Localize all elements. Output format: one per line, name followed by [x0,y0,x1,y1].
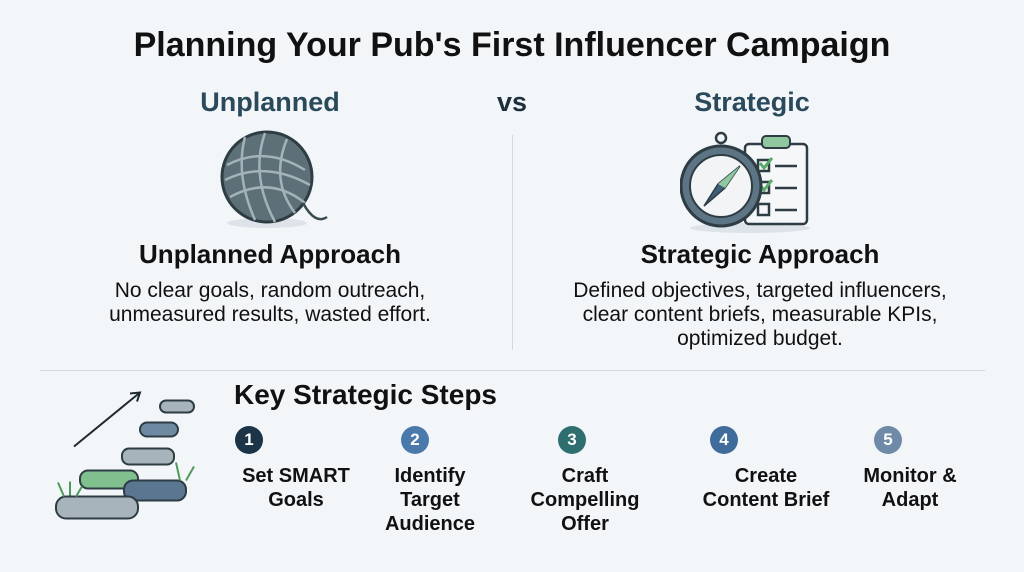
text: Offer [561,513,609,535]
heading: unplanned: Unplanned [200,87,340,117]
step 5 [863,426,957,511]
icon: compass and clipboard [680,132,810,233]
text: unplanned approach: No clear goals, random outreach, [115,279,425,302]
text: Create [735,465,797,487]
text: Target [400,489,460,511]
text: Compelling [531,489,639,511]
text: 3 [567,430,577,449]
heading: key strategic steps: Key Strategic Steps [234,379,497,410]
text: strategic approach [573,239,947,350]
title: Planning Your Pub's First Influencer Campaign [134,26,890,64]
text: Identify [394,465,466,487]
text: strategic approach: clear content briefs, measurable KPIs, [583,303,937,326]
step 3 [531,426,639,535]
text: Craft [562,465,608,487]
text: Goals [268,489,324,511]
text: strategic approach: optimized budget. [677,327,843,350]
step 4 [703,426,830,511]
text: unplanned approach: Unplanned Approach [139,239,401,269]
text: Adapt [882,489,938,511]
text: 5 [883,430,893,449]
icon: stepping stones [55,391,195,520]
text: strategic approach: Strategic Approach [641,239,879,269]
step 2 [385,426,475,535]
step 1 [235,426,350,511]
text: Set SMART [242,465,350,487]
text: 4 [719,430,729,449]
text: Content Brief [703,489,829,511]
heading: vs: vs [497,87,527,117]
text: Audience [385,513,475,535]
text: strategic approach: Defined objectives, targeted influencers, [573,279,947,302]
text: Monitor & [863,465,957,487]
text: unplanned approach: unmeasured results, wasted effort. [109,303,431,326]
text: 1 [244,430,254,449]
text: unplanned approach [109,239,431,326]
heading: strategic: Strategic [694,87,810,117]
text: 2 [410,430,420,449]
icon: yarn ball [220,130,328,228]
